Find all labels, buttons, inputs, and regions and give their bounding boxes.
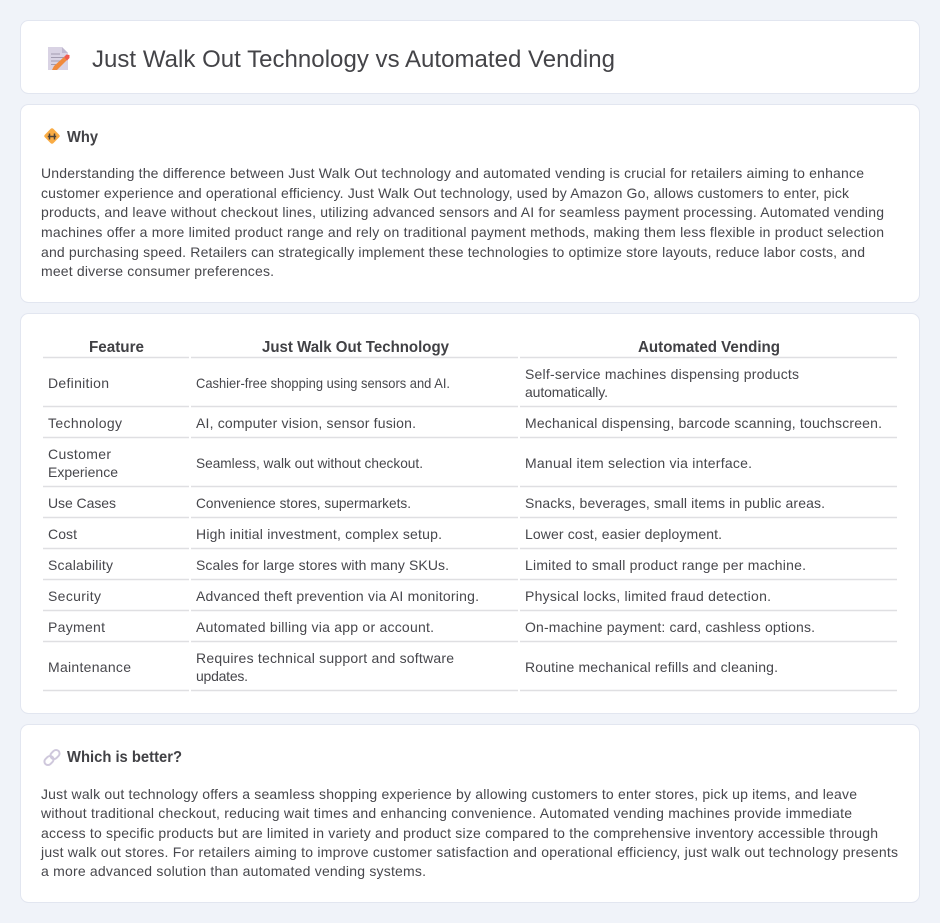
icon: document with pencil	[48, 47, 70, 70]
table header: Just Walk Out Technology	[262, 339, 449, 356]
row: customer experience: Manual item selection via interface.	[525, 455, 752, 471]
panel: title	[20, 20, 920, 94]
heading: page title: Just Walk Out Technology vs Automated Vending	[92, 46, 615, 73]
table header: Automated Vending	[638, 339, 780, 356]
row: maintenance: updates.	[196, 668, 248, 684]
text block: which is better paragraph: a more advanced solution than automated vending systems.	[41, 863, 426, 879]
row: definition: Cashier-free shopping using sensors and AI.	[196, 375, 450, 391]
text block: why paragraph: meet diverse consumer preferences.	[41, 263, 274, 279]
row: customer experience: Experience	[48, 464, 118, 480]
row: payment	[48, 619, 815, 635]
row: customer experience: Seamless, walk out without checkout.	[196, 455, 423, 471]
row: scalability: Limited to small product range per machine.	[525, 557, 806, 573]
row: security: Security	[48, 588, 101, 604]
row: cost	[48, 526, 722, 542]
row: maintenance	[48, 650, 778, 684]
row: cost: Lower cost, easier deployment.	[525, 526, 722, 542]
text block: which is better paragraph: access to specific products but are limited in variety and product size compared to the comprehensive inventory accessible through	[41, 825, 878, 841]
row: customer experience: Customer	[48, 446, 111, 462]
panel: which is better	[20, 724, 920, 902]
row: scalability: Scalability	[48, 557, 113, 573]
row: technology: AI, computer vision, sensor fusion.	[196, 415, 416, 431]
row: definition: automatically.	[525, 384, 608, 400]
row: maintenance: Maintenance	[48, 659, 131, 675]
panel: comparison table	[20, 314, 920, 714]
text block: why paragraph: machines offer a more limited product range and rely on traditional payment methods, making them less flexible in product selection	[41, 224, 884, 240]
panel: why	[20, 104, 920, 302]
text block: which is better paragraph: without traditional checkout, reducing wait times and enhancing convenience. Automated vending machines provide immediate	[40, 805, 852, 821]
heading: why: Why	[67, 129, 98, 146]
row: use cases: Convenience stores, supermarkets.	[196, 495, 411, 511]
icon: construction diamond	[44, 128, 60, 144]
row: definition: Definition	[48, 375, 109, 391]
row: security: Physical locks, limited fraud detection.	[525, 588, 771, 604]
table header	[89, 339, 780, 356]
heading: which is better: Which is better?	[67, 749, 182, 766]
row: maintenance: Requires technical support and software	[196, 650, 454, 666]
text block: why paragraph: customer experience and operational efficiency. Just Walk Out technology, used by Amazon Go, allows customers to enter, pick	[41, 185, 850, 201]
row: cost: Cost	[48, 526, 77, 542]
row: technology: Mechanical dispensing, barcode scanning, touchscreen.	[525, 415, 882, 431]
row: use cases: Use Cases	[48, 495, 116, 511]
icon: link	[43, 748, 61, 767]
row: definition	[48, 366, 799, 400]
text block: which is better paragraph	[40, 786, 898, 879]
row: security	[48, 588, 771, 604]
text block: which is better paragraph: just walk out stores. For retailers aiming to improve customer satisfaction and operational efficiency, just walk out technology presents	[40, 844, 898, 860]
row: use cases	[48, 495, 825, 511]
table header: Feature	[89, 339, 144, 356]
row: use cases: Snacks, beverages, small items in public areas.	[525, 495, 825, 511]
row: security: Advanced theft prevention via AI monitoring.	[196, 588, 479, 604]
row: payment: Payment	[48, 619, 105, 635]
text block: which is better paragraph: Just walk out technology offers a seamless shopping experience by allowing customers to enter stores, pick up items, and leave	[41, 786, 857, 802]
row: payment: On-machine payment: card, cashless options.	[525, 619, 815, 635]
row: definition: Self-service machines dispensing products	[525, 366, 799, 382]
row: technology	[48, 415, 882, 431]
row: technology: Technology	[48, 415, 122, 431]
row: scalability: Scales for large stores with many SKUs.	[196, 557, 449, 573]
text block: why paragraph	[41, 165, 884, 279]
text block: why paragraph: products, and leave without checkout lines, utilizing advanced sensors and AI for seamless payment processing. Automated vending	[41, 204, 884, 220]
row: customer experience	[48, 446, 752, 480]
text block: why paragraph: Understanding the difference between Just Walk Out technology and automated vending is crucial for retailers aiming to enhance	[41, 165, 864, 181]
row: maintenance: Routine mechanical refills and cleaning.	[525, 659, 778, 675]
row: cost: High initial investment, complex setup.	[196, 526, 442, 542]
text block: why paragraph: and purchasing speed. Retailers can strategically implement these technologies to optimize store layouts, reduce labor costs, and	[41, 244, 865, 260]
row: payment: Automated billing via app or account.	[196, 619, 434, 635]
row: scalability	[48, 557, 806, 573]
